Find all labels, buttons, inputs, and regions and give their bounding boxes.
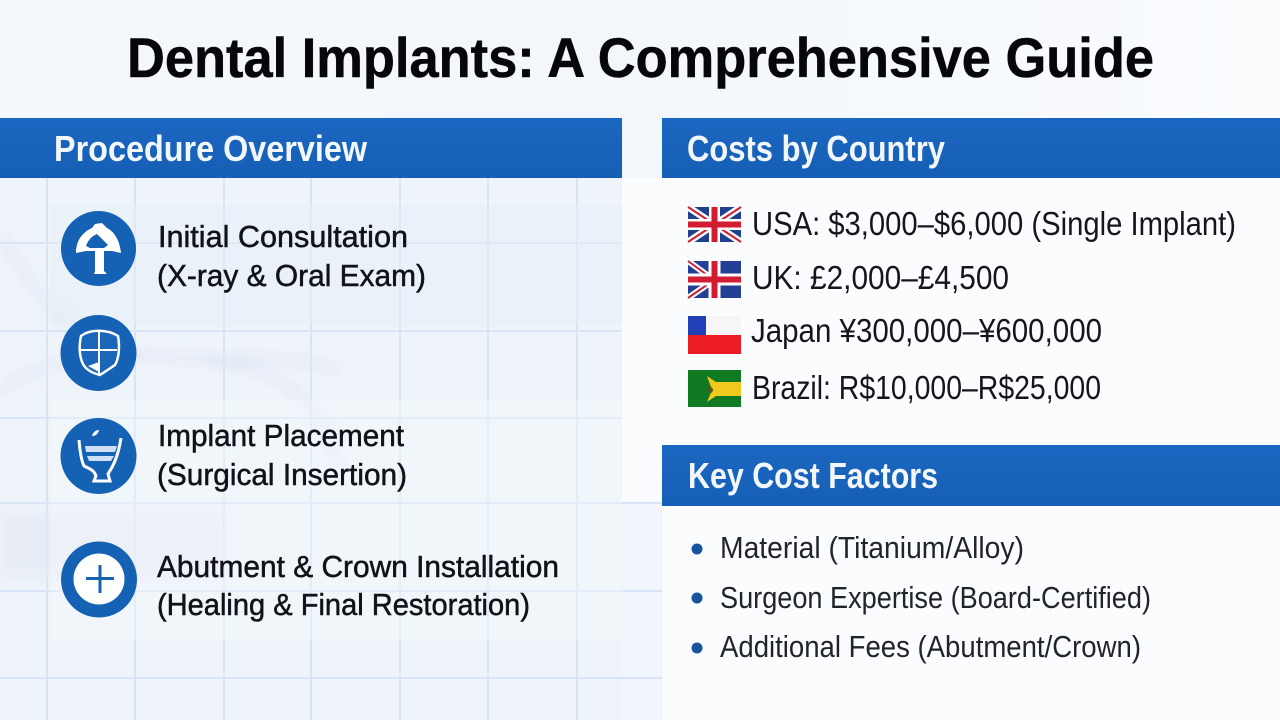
panel: procedure overview [0,118,622,622]
panel: costs by country [662,118,1280,407]
icon: Brazil flag [688,370,741,407]
icon: shield [60,315,136,391]
text: abutment and crown: Abutment & Crown Installation [157,549,559,584]
step 4: abutment and crown [61,542,559,622]
text: implant placement [157,418,407,492]
bullet: surgeon expertise: Surgeon Expertise (Board-Certified) [720,580,1151,615]
text: Brazil cost: Brazil: R$10,000–R$25,000 [752,369,1101,406]
text: implant placement: (Surgical Insertion) [157,457,407,492]
icon: UK flag [688,261,741,298]
heading: key cost factors: Key Cost Factors [688,455,938,496]
text: UK cost: UK: £2,000–£4,500 [752,259,1009,296]
text: initial consultation: Initial Consultation [158,219,408,254]
icon: USA flag [688,207,741,242]
row: USA [688,205,1236,242]
text: initial consultation: (X-ray & Oral Exam) [157,258,426,293]
row: UK [688,259,1009,298]
panel: key cost factors [662,445,1280,664]
text: abutment and crown: (Healing & Final Restoration) [157,587,530,622]
row: Brazil [688,369,1101,407]
icon: implant cup [60,418,136,494]
text: implant placement: Implant Placement [158,418,404,453]
heading: costs by country [662,118,1280,178]
text: abutment and crown [157,549,559,622]
bullet: material: Material (Titanium/Alloy) [720,530,1024,565]
bullet: additional fees: Additional Fees (Abutment/Crown) [720,629,1141,664]
step 3: implant placement [60,418,407,494]
row: Japan [688,312,1102,354]
step 1: initial consultation [61,211,426,293]
icon: dental instrument [61,211,136,286]
title: Dental Implants: A Comprehensive Guide [127,26,1154,89]
text: initial consultation [157,219,426,293]
heading: costs by country: Costs by Country [687,128,945,169]
icon: plus [61,542,137,618]
step 2: icon only [60,315,136,391]
heading: procedure overview: Procedure Overview [54,128,368,169]
icon: Japan flag [688,316,741,354]
heading: key cost factors [662,445,1280,506]
text: Japan cost: Japan ¥300,000–¥600,000 [751,312,1102,349]
heading: procedure overview [0,118,622,178]
